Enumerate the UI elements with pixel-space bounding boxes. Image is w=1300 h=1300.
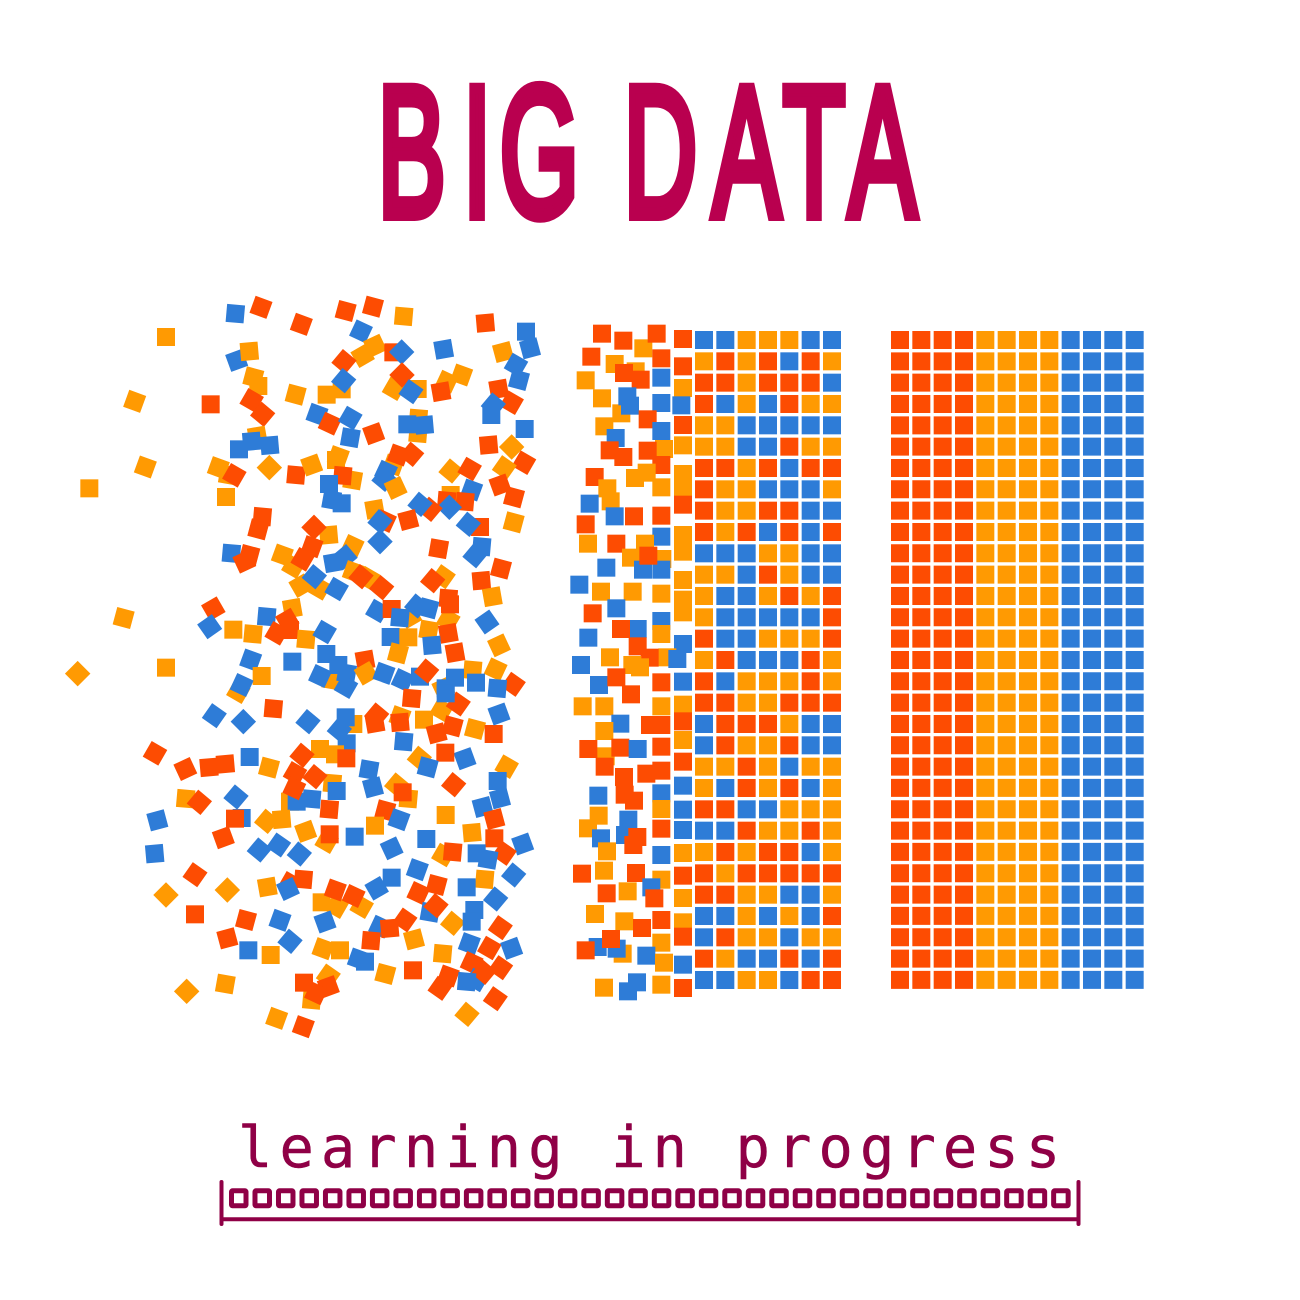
ragged squares: middle part: [570, 543, 692, 786]
progress bar cells: [232, 1191, 1068, 1206]
ragged squares: upper part: [577, 325, 692, 553]
sorted column band: orange-red: [900, 331, 964, 990]
progress bar bracket: [222, 1182, 1078, 1224]
sorted column band: blue: [1071, 331, 1135, 990]
panel: fully sorted data grid: [900, 331, 1135, 990]
panel: scattered data squares: [65, 296, 541, 1038]
panel: partly ordered data squares: [570, 325, 841, 1000]
progress bar: [222, 1182, 1078, 1224]
sorted column band: amber: [985, 331, 1049, 990]
caption: learning in progress: learning in progress: [238, 1115, 1067, 1181]
ragged squares: lower part: [573, 777, 692, 1000]
mixed colour grid: [695, 331, 841, 989]
title: BIG DATA: BIG DATA: [378, 48, 917, 255]
